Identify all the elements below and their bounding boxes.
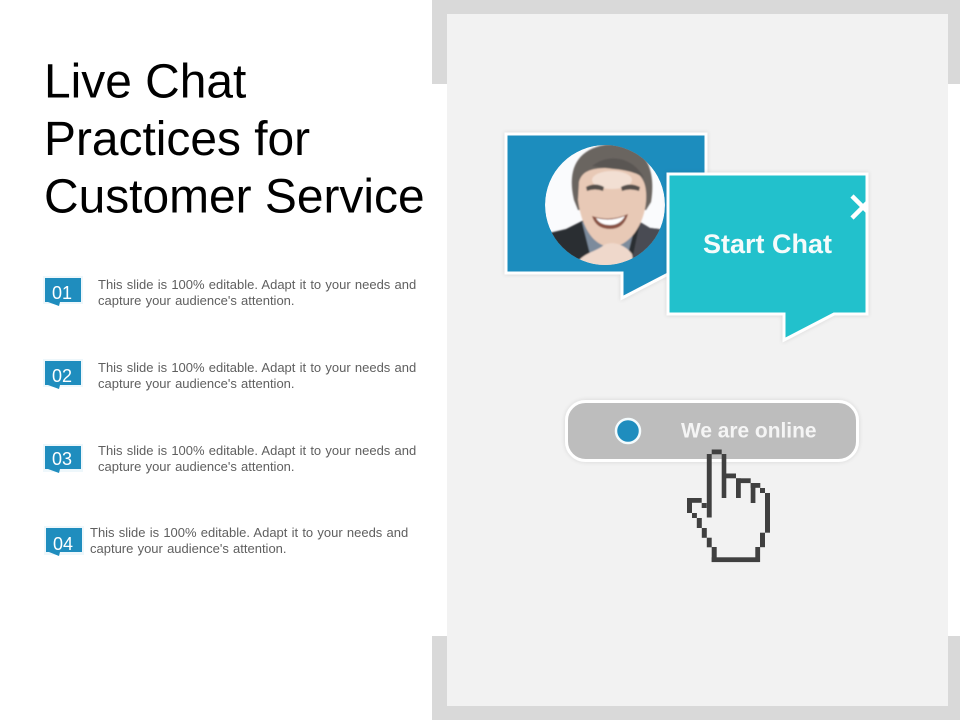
list item 04: [44, 525, 412, 556]
badge 02: [43, 359, 83, 389]
title: Practices for: [44, 113, 310, 166]
badge 01: 01: [52, 283, 72, 303]
badge 03: 03: [52, 449, 72, 469]
status pill: we are online: [566, 402, 858, 460]
badge 01: [43, 276, 83, 306]
title: Live Chat: [44, 56, 246, 108]
portrait photo: [545, 144, 668, 271]
text 03: capture your audience's attention.: [98, 459, 295, 474]
speech bubble: start chat: [668, 174, 874, 340]
status dot: [616, 419, 640, 443]
badge 04: 04: [53, 534, 73, 554]
button label: Start Chat: Start Chat: [703, 229, 832, 259]
badge 02: 02: [52, 366, 72, 386]
icon: close: [850, 194, 866, 220]
text 04: This slide is 100% editable. Adapt it to your needs and: [90, 525, 408, 540]
text 01: This slide is 100% editable. Adapt it to your needs and: [98, 277, 416, 292]
text 01: capture your audience's attention.: [98, 293, 295, 308]
list item 01: [43, 276, 420, 308]
panel: chat area: [447, 14, 948, 706]
icon: pixel hand cursor: [687, 450, 770, 562]
badge 04: [44, 526, 84, 556]
text 03: This slide is 100% editable. Adapt it to your needs and: [98, 443, 416, 458]
text 04: capture your audience's attention.: [90, 541, 287, 556]
status label: We are online: [681, 420, 816, 442]
panel: background frame: [432, 0, 960, 720]
title: Customer Service: [44, 170, 425, 224]
text 02: This slide is 100% editable. Adapt it to your needs and: [98, 360, 416, 375]
badge 03: [43, 444, 83, 473]
list item 02: [43, 359, 420, 391]
text 02: capture your audience's attention.: [98, 376, 295, 391]
list item 03: [43, 443, 420, 474]
speech bubble: agent portrait: [506, 134, 706, 298]
